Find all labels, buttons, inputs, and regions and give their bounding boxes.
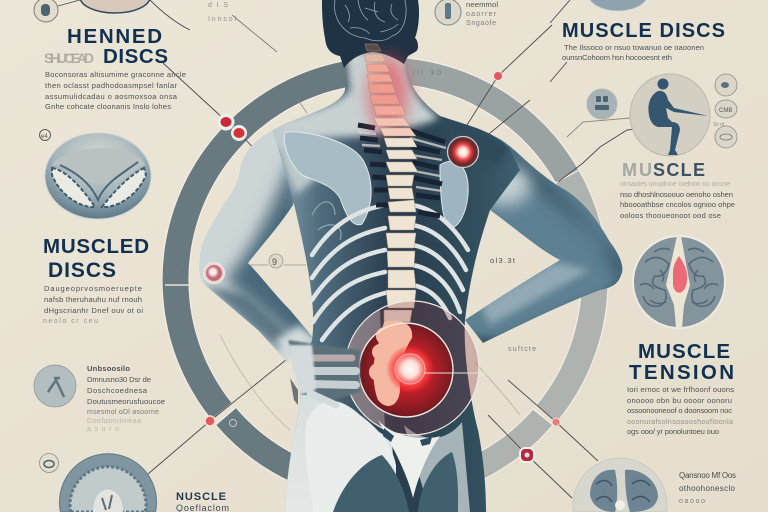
leader lines bbox=[148, 0, 650, 498]
chest side pattern bbox=[312, 202, 341, 240]
text block: neolo cr ceu bbox=[43, 318, 98, 325]
text block: nafsb Iheruhauhu nuf rnouh bbox=[44, 295, 142, 304]
ring: dark left arc bbox=[162, 57, 385, 420]
text block bbox=[87, 364, 165, 433]
panel: mid right captions: suftcte bbox=[508, 346, 536, 353]
text block bbox=[620, 181, 735, 220]
panel: top centre note: neemmol bbox=[466, 0, 498, 9]
panel: mid right captions bbox=[490, 256, 536, 353]
panel: top left caption: dIS bbox=[208, 2, 228, 9]
text block: asuro bbox=[87, 426, 119, 433]
text block: ooloos thooueonoot ood ose bbox=[620, 211, 721, 220]
ribs bbox=[312, 205, 468, 340]
text block: onoooo obn bu oooor oonoru bbox=[627, 396, 732, 405]
icon: brain cross-section bbox=[633, 236, 725, 328]
text block: Doschcoednesa bbox=[87, 386, 148, 395]
icon: side circles: CMB bbox=[719, 108, 732, 114]
text block: nso dhoshlnosoouo oenoho oshen bbox=[620, 190, 733, 199]
left arm bbox=[199, 130, 312, 362]
panel: mid right captions: ol3.3t bbox=[490, 256, 516, 265]
panel: muscle discs top right bbox=[562, 0, 725, 62]
brain outline bbox=[335, 0, 406, 41]
label: number nine: 9 bbox=[272, 257, 277, 267]
sacrum bbox=[378, 420, 440, 498]
text block bbox=[562, 43, 704, 62]
text block: oaooo bbox=[679, 498, 705, 505]
heading: SCLE bbox=[653, 160, 705, 180]
caption bbox=[176, 491, 229, 512]
label: number nine bbox=[269, 254, 283, 268]
icon: bottle circle bbox=[435, 0, 461, 25]
heading: MUSCLED bbox=[43, 235, 149, 258]
torso bbox=[270, 40, 520, 512]
text block: Iori ernoc ot we frfhoonf ouons bbox=[627, 385, 734, 394]
text block bbox=[627, 385, 734, 436]
marker nodes bbox=[204, 72, 560, 462]
heading: SHUCEAD bbox=[44, 50, 94, 66]
text block: ossoonooneoof o doonsoom noc bbox=[627, 406, 732, 415]
heading: TENSION bbox=[629, 361, 734, 384]
panel: muscle tension bbox=[627, 236, 734, 436]
icon: small eye circle bbox=[40, 454, 58, 472]
text block: assumulidcadau o aosmoxsoa onsa bbox=[45, 92, 178, 101]
glutes bbox=[333, 455, 409, 512]
right arm bbox=[465, 136, 622, 343]
text block: Doutusmeorusfuoucoe bbox=[87, 397, 165, 406]
spine red glow bbox=[368, 55, 408, 135]
text block: hboooathbse cncolos ognioo ohpe bbox=[620, 200, 735, 209]
back light shading bbox=[270, 50, 440, 150]
heading: MUSCLE bbox=[638, 340, 730, 363]
heading: MU bbox=[622, 160, 652, 180]
lumbar vertebrae bbox=[369, 321, 412, 406]
text block: ounsnCohoom hsn hocooesnt eth bbox=[562, 53, 672, 62]
heading bbox=[622, 160, 705, 180]
head bbox=[322, 0, 419, 68]
ring: dark lower left arc bbox=[216, 407, 385, 503]
ring diagram: ill 30 bbox=[413, 70, 441, 77]
text block: ogs ooo/ yr ponoluntoeu ouo bbox=[627, 427, 719, 436]
icon: disc illustration bbox=[45, 133, 151, 219]
text block: dHgscrianhr Dnef ouv ot oi bbox=[44, 306, 143, 315]
text block: Dmnusno30 Dsr de bbox=[87, 375, 151, 384]
icon: bottom brain bbox=[573, 458, 667, 512]
icon: side circles bbox=[713, 74, 737, 148]
heading: HENNED bbox=[67, 25, 162, 48]
ring diagram: 3 bbox=[174, 268, 178, 275]
upper ribs bbox=[358, 125, 445, 216]
text block: msesmol oDl asoorne bbox=[87, 409, 159, 416]
panel: top left caption bbox=[208, 2, 236, 23]
icon: side circles: Sil ot bbox=[713, 122, 725, 128]
text block: othoohonesclo bbox=[679, 484, 736, 493]
panel: seated figure bbox=[587, 74, 737, 220]
lower hips bbox=[283, 395, 396, 512]
panel: top centre note: oaorrer bbox=[466, 11, 497, 18]
panel: top centre note: Sngaofe bbox=[466, 20, 496, 27]
text block: The Ilssoco or nsuo towanuo oe oaoonen bbox=[564, 43, 704, 52]
shoulder blade right bbox=[440, 161, 468, 228]
text block bbox=[45, 70, 186, 111]
text block: Gnhe cohcate cloonanis Inslo lohes bbox=[45, 102, 171, 111]
ring: right arc bbox=[536, 170, 608, 423]
sacrum holes bbox=[383, 428, 432, 446]
ring: lower right arc bbox=[385, 409, 553, 503]
text block: Qansnoo Mf Oos bbox=[679, 471, 736, 480]
text block: Doefatmrlmeaa bbox=[87, 418, 141, 425]
heading bbox=[44, 25, 168, 68]
heading bbox=[629, 340, 734, 384]
ring diagram bbox=[162, 57, 608, 503]
panel: bottom right bbox=[573, 458, 736, 512]
icon: seated person in circle bbox=[630, 74, 710, 156]
pain zone bbox=[345, 301, 500, 435]
shoulder blade left bbox=[284, 132, 371, 225]
panel: lower left note bbox=[34, 364, 165, 433]
heading: MUSCLE DISCS bbox=[562, 20, 725, 42]
heading: DISCS bbox=[103, 45, 168, 68]
text block: Unbsoosilo bbox=[87, 364, 130, 373]
panel: top left caption: Innsol bbox=[208, 16, 236, 23]
text block bbox=[679, 471, 736, 505]
icon: small number badge bbox=[40, 130, 50, 140]
icon: top right disc bbox=[588, 0, 648, 11]
icon: top disc bbox=[80, 0, 150, 13]
human figure bbox=[190, 0, 640, 512]
panel: top centre note bbox=[435, 0, 498, 27]
text block: onsaotes onuplnoe roelnon oo ansne bbox=[620, 181, 730, 188]
text block: then oclasst padhodoasmpsel fanlar bbox=[45, 81, 177, 90]
icon: small capsule bbox=[34, 0, 80, 22]
panel: herniated discs top left bbox=[34, 0, 186, 219]
hand bbox=[288, 340, 360, 405]
panel: coin bottom left bbox=[40, 454, 229, 512]
icon: small grid circle bbox=[587, 89, 617, 119]
icon: grey circle bbox=[34, 365, 76, 407]
heading: DISCS bbox=[48, 259, 116, 282]
icon: small number badge: e4 bbox=[41, 134, 48, 140]
text block bbox=[43, 284, 143, 325]
heading bbox=[43, 235, 149, 282]
text block: Boconsoras altisumime graconne ancle bbox=[45, 70, 186, 79]
caption: NUSCLE bbox=[176, 491, 226, 503]
text block: Daugeoprvosmoeruepte bbox=[44, 284, 142, 293]
icon: coin illustration bbox=[60, 454, 157, 512]
ring: upper right arc bbox=[385, 57, 579, 183]
spine vertebrae bbox=[364, 44, 418, 322]
text block: ooonurafsolnsoaooshoofloonla bbox=[627, 419, 733, 426]
panel: muscled discs left bbox=[43, 235, 149, 325]
